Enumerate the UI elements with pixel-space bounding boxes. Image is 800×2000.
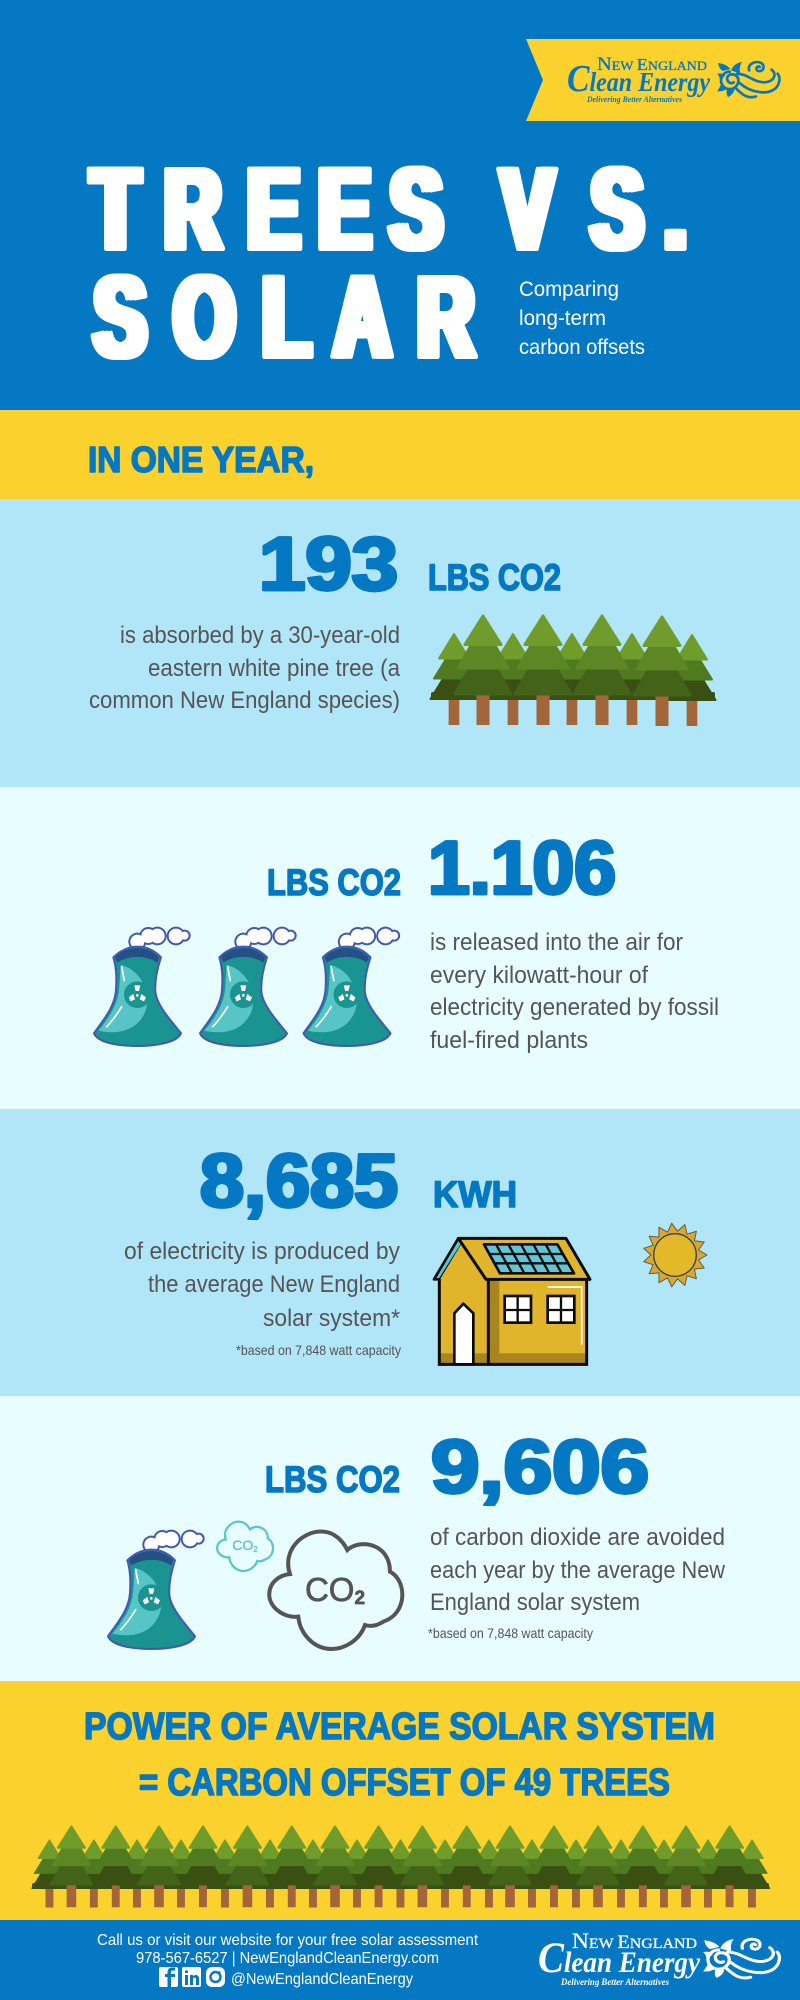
icon: linkedin (182, 1967, 201, 1987)
panel: fossil fuel emissions (0, 787, 800, 1109)
conclusion heading: POWER OF AVERAGE SOLAR SYSTEM (84, 1706, 715, 1748)
logo banner (526, 39, 800, 121)
description (430, 929, 719, 1054)
number 8,685: 8,685 (200, 1139, 398, 1224)
title: SOLAR (94, 252, 474, 381)
description: of carbon dioxide are avoided (430, 1524, 725, 1551)
description: England solar system (430, 1589, 640, 1616)
icon: power plant (108, 1530, 205, 1649)
contact text: @NewEnglandCleanEnergy (231, 1971, 413, 1988)
number 1.106: 1.106 (428, 826, 616, 911)
contact text (97, 1932, 479, 1988)
description: eastern white pine tree (a (148, 655, 401, 682)
panel: footer (0, 1920, 800, 2000)
footnote: *based on 7,848 watt capacity (428, 1625, 593, 1641)
contact text: Call us or visit our website for your free solar assessment (97, 1932, 479, 1949)
description: common New England species) (89, 687, 400, 714)
logo: Delivering Better Alternatives (560, 1977, 669, 1987)
footnote: *based on 7,848 watt capacity (236, 1342, 401, 1358)
description: fuel-fired plants (430, 1027, 588, 1054)
number 193: 193 (259, 522, 398, 607)
description (124, 1238, 400, 1332)
icon: large co2 cloud: 2 (354, 1588, 365, 1609)
subtitle: Comparing (519, 278, 619, 301)
title: TREES VS. (92, 144, 686, 273)
description: solar system* (263, 1305, 400, 1332)
icon: small co2 cloud: CO (232, 1537, 253, 1553)
logo: NEW ENGLAND (572, 1928, 697, 1953)
logo (538, 1928, 779, 1987)
description: of electricity is produced by (124, 1238, 400, 1265)
icon: large co2 cloud: CO (305, 1571, 354, 1608)
conclusion heading (84, 1706, 715, 1804)
logo banner: Clean Energy (567, 58, 711, 100)
icon: house with solar panels (434, 1238, 590, 1364)
subtitle (519, 278, 645, 359)
icon: large co2 cloud (269, 1532, 402, 1649)
panel: in one year heading (0, 410, 800, 499)
icon: facebook (159, 1967, 178, 1987)
icon: sun (644, 1223, 707, 1287)
number 9,606: 9,606 (431, 1425, 649, 1510)
description (89, 622, 401, 714)
panel: conclusion (0, 1681, 800, 1920)
icon: power plants (94, 927, 400, 1046)
description (430, 1524, 726, 1616)
description: each year by the average New (430, 1557, 726, 1584)
icon: instagram (206, 1967, 225, 1987)
title (92, 144, 686, 381)
contact text: 978-567-6527 | NewEnglandCleanEnergy.com (136, 1950, 439, 1967)
panel: carbon avoided (0, 1396, 800, 1681)
description: is released into the air for (430, 929, 683, 956)
description: every kilowatt-hour of (430, 962, 648, 989)
description: the average New England (148, 1271, 400, 1298)
panel: tree absorption (0, 499, 800, 787)
icon: forest (32, 1827, 769, 1908)
logo: Clean Energy (538, 1935, 701, 1982)
icon: small co2 cloud: 2 (253, 1545, 258, 1554)
panel: solar production (0, 1109, 800, 1396)
unit lbs co2: LBS CO2 (265, 1459, 400, 1500)
icon: pine trees (430, 616, 716, 726)
icon: small co2 cloud (217, 1522, 273, 1571)
panel: in one year heading: IN ONE YEAR, (88, 439, 314, 480)
description: electricity generated by fossil (430, 994, 719, 1021)
logo banner: NEW ENGLAND (597, 54, 707, 75)
unit lbs co2: LBS CO2 (428, 557, 561, 598)
unit kwh: KWH (433, 1174, 517, 1215)
logo banner: Delivering Better Alternatives (586, 95, 682, 104)
subtitle: long-term (519, 307, 606, 330)
subtitle: carbon offsets (519, 336, 645, 359)
panel: header (0, 0, 800, 410)
conclusion heading: = CARBON OFFSET OF 49 TREES (139, 1762, 670, 1804)
description: is absorbed by a 30-year-old (120, 622, 400, 649)
unit lbs co2: LBS CO2 (267, 862, 401, 903)
